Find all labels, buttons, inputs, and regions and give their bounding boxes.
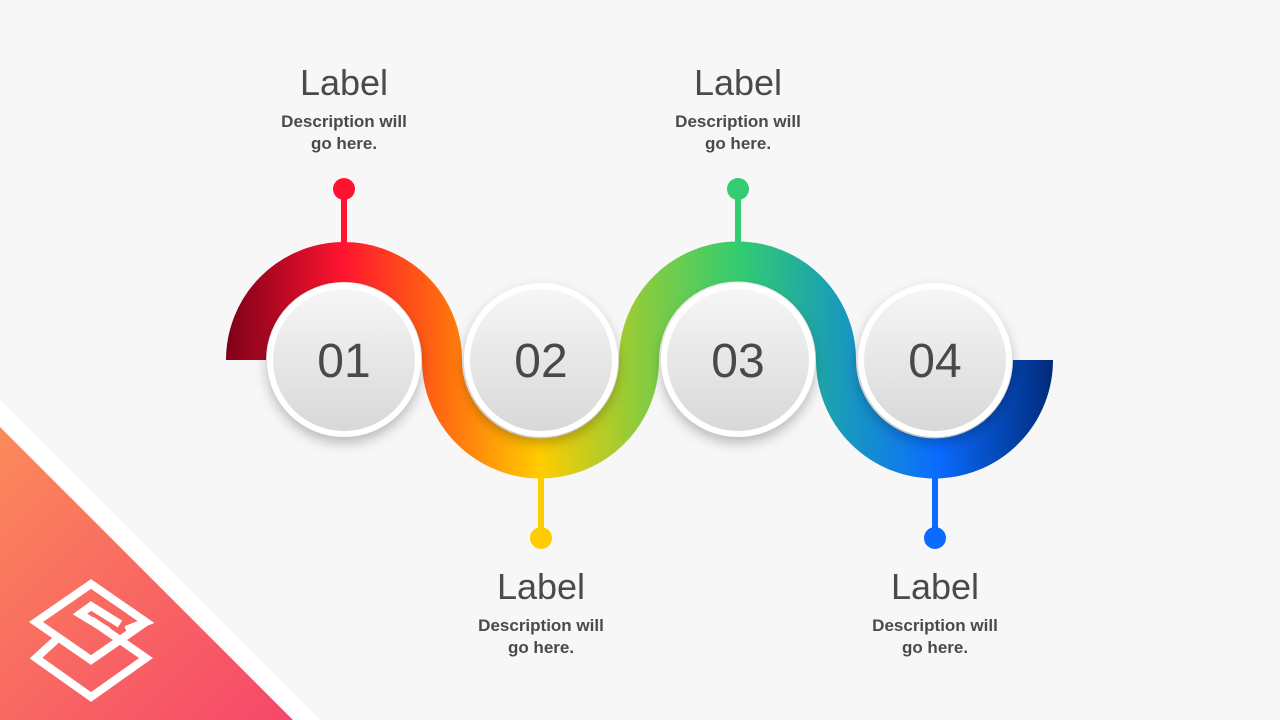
wave band	[246, 262, 1033, 458]
text block 3: Label	[694, 62, 782, 103]
text block 1	[281, 62, 407, 153]
pin 1	[333, 178, 355, 244]
text block 4: Label	[891, 566, 979, 607]
text block 4	[872, 566, 998, 657]
text block 1: go here.	[311, 134, 377, 153]
text block 3: go here.	[705, 134, 771, 153]
step 01 circle: 01	[317, 335, 371, 388]
pin 2	[530, 476, 552, 549]
corner decoration	[0, 400, 320, 720]
text block 2: Label	[497, 566, 585, 607]
text block 2	[478, 566, 604, 657]
icon: logo	[36, 584, 146, 697]
step 03 circle	[661, 283, 815, 437]
text block 1: Description will	[281, 112, 407, 131]
step 01 circle	[267, 283, 421, 437]
text block 2: Description will	[478, 616, 604, 635]
step 04 circle	[858, 283, 1012, 437]
text block 4: go here.	[902, 638, 968, 657]
step 02 circle	[464, 283, 618, 437]
text block 3: Description will	[675, 112, 801, 131]
pin 4	[924, 476, 946, 549]
step 04 circle: 04	[908, 335, 962, 388]
text block 3	[675, 62, 801, 153]
text block 2: go here.	[508, 638, 574, 657]
pin 3	[727, 178, 749, 244]
step 02 circle: 02	[514, 335, 568, 388]
text block 1: Label	[300, 62, 388, 103]
step 03 circle: 03	[711, 335, 765, 388]
text block 4: Description will	[872, 616, 998, 635]
